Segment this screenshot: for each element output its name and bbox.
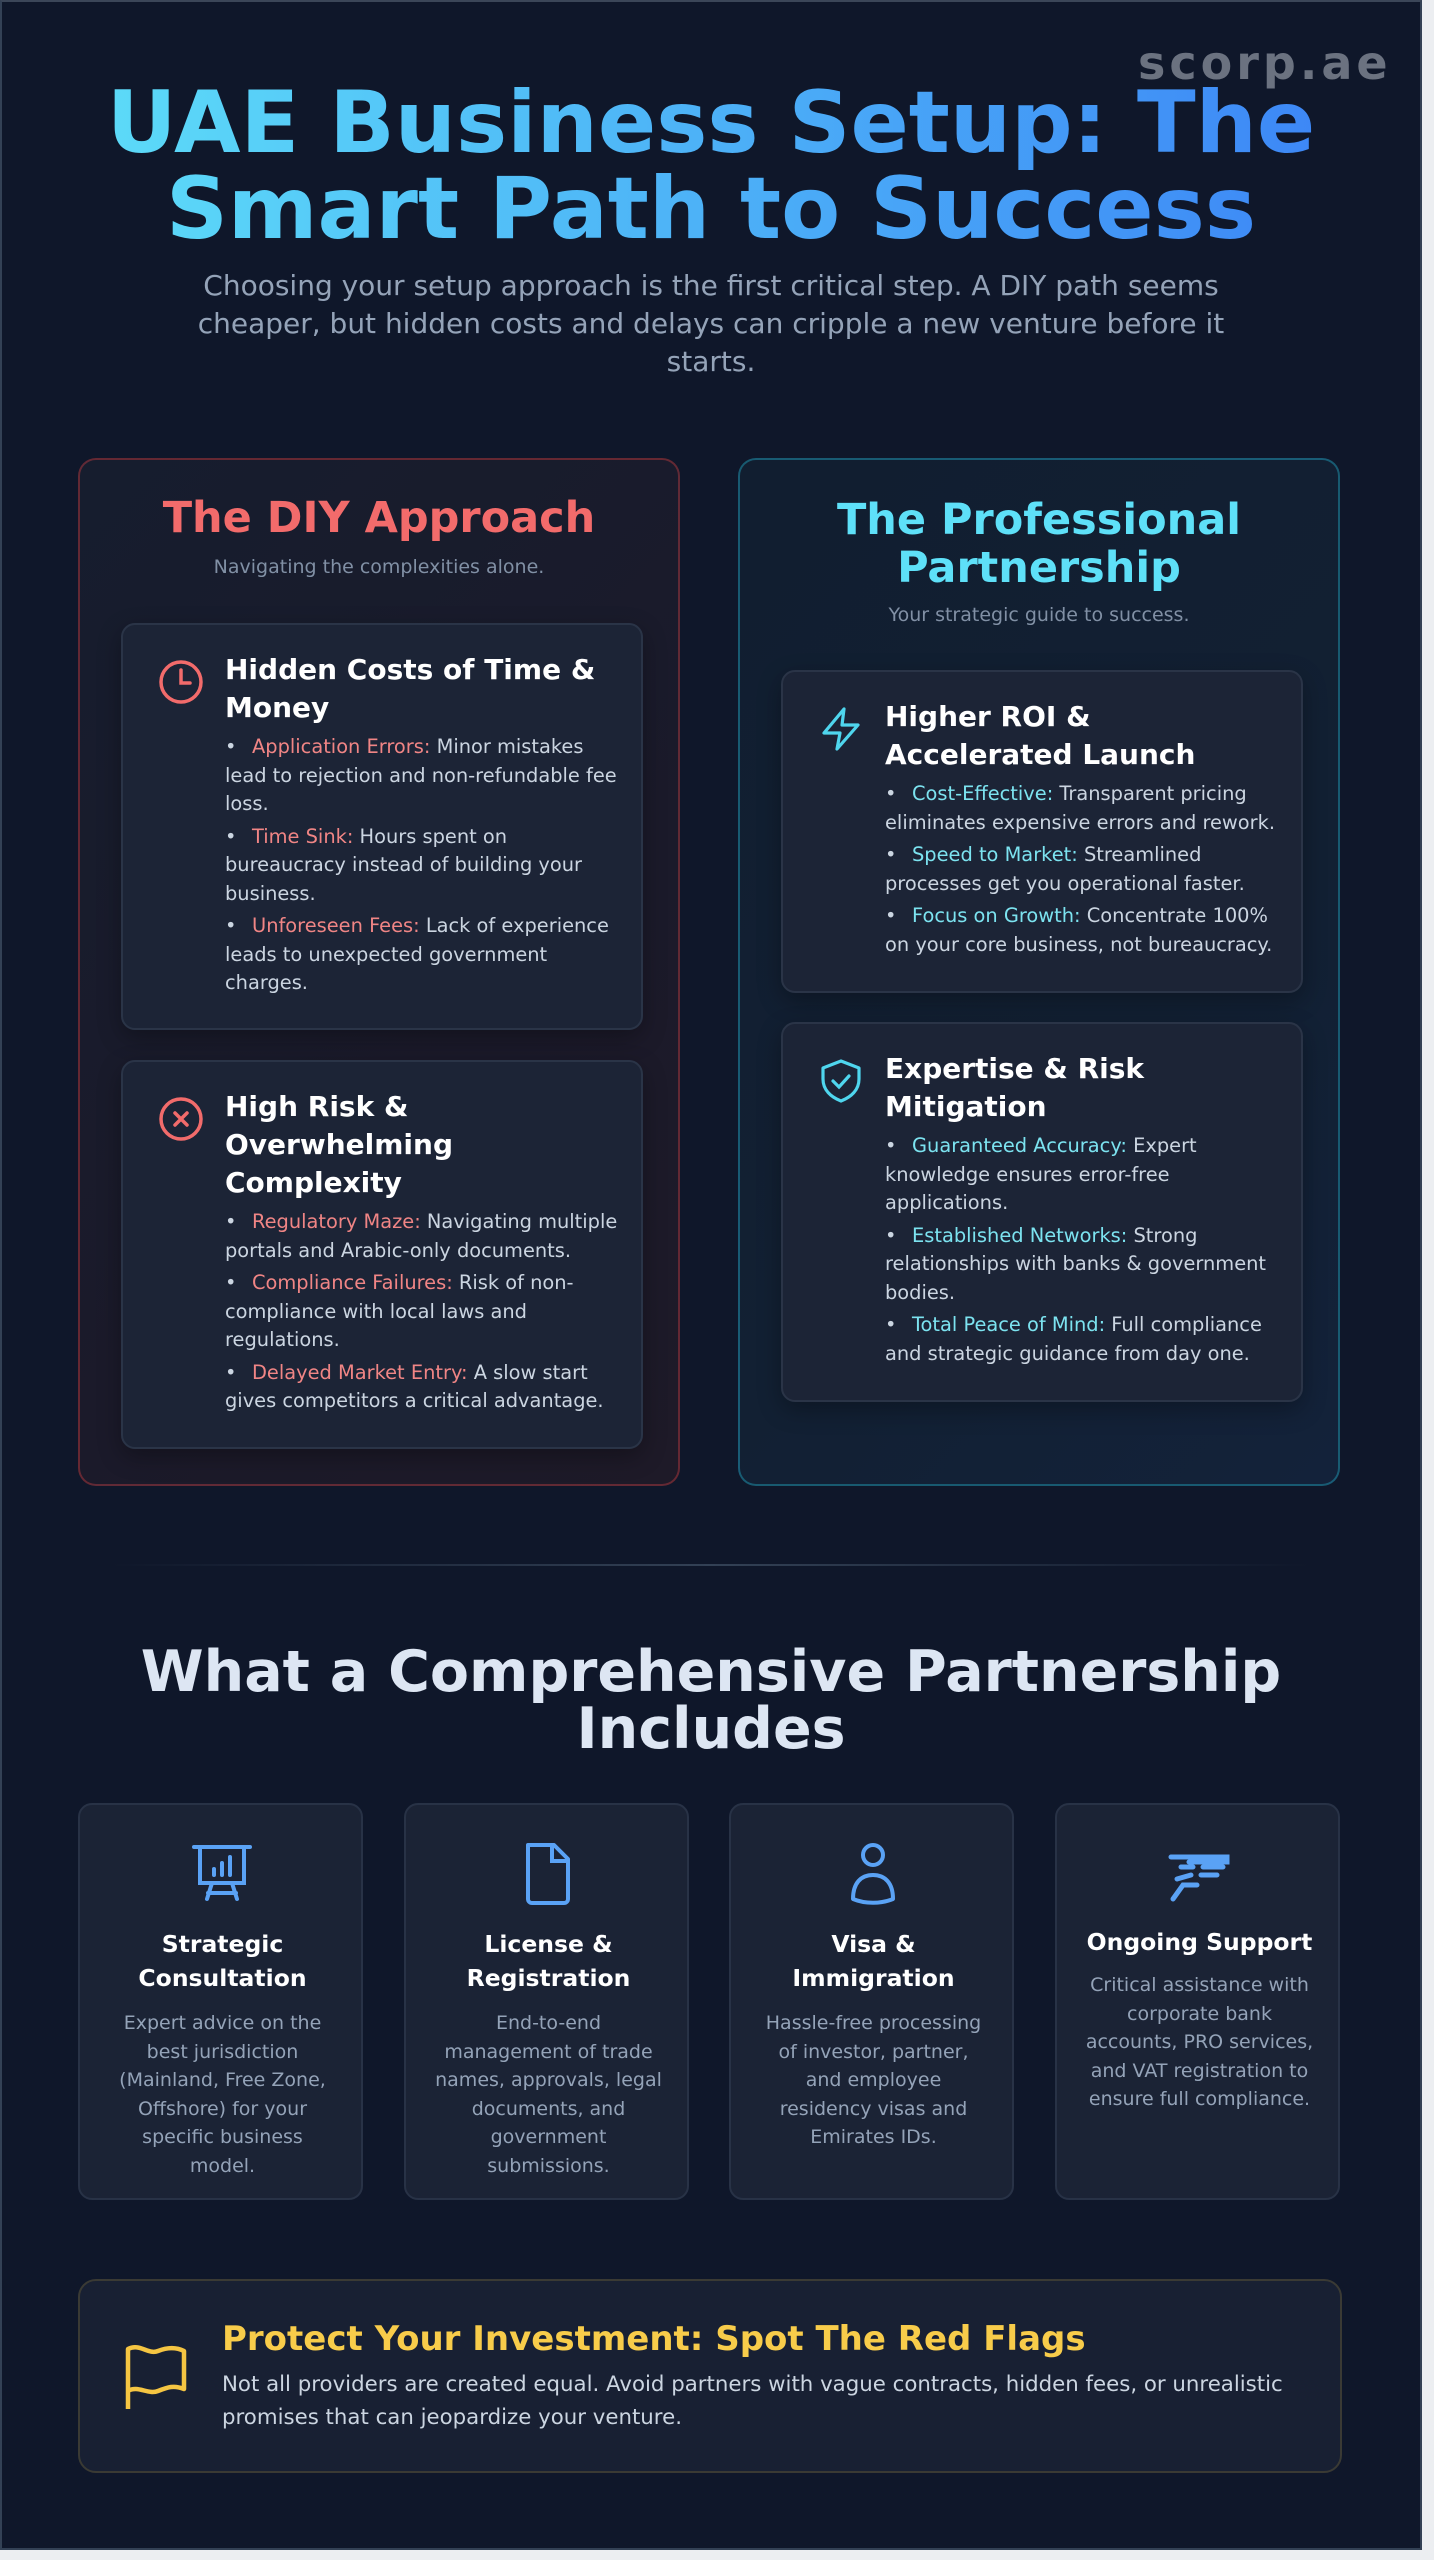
service: visa: Emirates IDs.	[810, 2126, 937, 2148]
subtitle: Choosing your setup approach is the first critical step. A DIY path seems cheaper, but hidden costs and delays can cripple a new venture before it starts.	[198, 269, 1224, 378]
card text: Cost-Effective: Transparent pricing eliminates expensive errors and rework.	[885, 782, 1275, 834]
card text: Guaranteed Accuracy: Expert knowledge ensures error-free applications.	[885, 1134, 1197, 1214]
section heading: What a Comprehensive Partnership	[141, 1639, 1281, 1705]
service: strategic consultation: (Mainland, Free Zone,	[119, 2069, 326, 2091]
service: license: government	[491, 2126, 606, 2148]
card text: •	[885, 904, 896, 927]
icon: lightning	[822, 707, 860, 751]
card text: •	[885, 1313, 896, 1336]
icon: support	[1168, 1854, 1230, 1902]
card text: Delayed Market Entry: A slow start gives competitors a critical advantage.	[225, 1360, 604, 1412]
card text: •	[225, 1360, 236, 1384]
service: strategic consultation: model.	[190, 2154, 255, 2176]
service: license: management of trade	[444, 2040, 653, 2062]
service: visa: Immigration	[792, 1964, 955, 1992]
service: license: names, approvals, legal	[435, 2069, 662, 2091]
service: visa: of investor, partner,	[778, 2040, 969, 2062]
card text	[885, 700, 1275, 956]
section heading: Includes	[576, 1696, 846, 1762]
card text: Hidden Costs of Time & Money	[225, 653, 595, 724]
card text: •	[885, 1224, 896, 1246]
card text: •	[885, 782, 896, 805]
card: hidden costs	[121, 623, 643, 1030]
service: visa: Hassle-free processing	[766, 2012, 981, 2034]
service: strategic consultation: Expert advice on the	[124, 2012, 321, 2034]
service: strategic consultation: best jurisdiction	[147, 2040, 298, 2062]
service: ongoing support: Critical assistance with	[1090, 1974, 1309, 1996]
card text: Application Errors: Minor mistakes lead to rejection and non-refundable fee loss.	[225, 735, 617, 815]
card text: •	[225, 914, 236, 937]
card text: Time Sink: Hours spent on bureaucracy instead of building your business.	[225, 824, 582, 904]
panel: professional partnership	[738, 458, 1340, 1486]
card text: Focus on Growth: Concentrate 100% on your core business, not bureaucracy.	[885, 904, 1272, 956]
card text: Compliance Failures: Risk of non-compliance with local laws and regulations.	[225, 1271, 574, 1351]
section heading	[141, 1639, 1281, 1762]
panel: DIY approach	[78, 458, 680, 1486]
card text: Unforeseen Fees: Lack of experience leads to unexpected government charges.	[225, 914, 609, 994]
icon: presentation	[192, 1845, 252, 1901]
card text	[225, 1090, 617, 1412]
panel subtitle: Your strategic guide to success.	[888, 604, 1190, 626]
title: Smart Path to Success	[166, 159, 1256, 259]
service: license: Registration	[467, 1964, 630, 1992]
card text: Higher ROI & Accelerated Launch	[885, 700, 1195, 771]
icon: shield check	[821, 1059, 861, 1103]
heading: DIY: The DIY Approach	[163, 493, 595, 543]
card text: Total Peace of Mind: Full compliance and strategic guidance from day one.	[885, 1313, 1262, 1364]
card text	[885, 1052, 1266, 1364]
service: visa: residency visas and	[780, 2098, 967, 2120]
card text: High Risk & Overwhelming Complexity	[225, 1090, 453, 1199]
callout: red flags	[78, 2279, 1342, 2473]
card text: •	[885, 1134, 896, 1157]
card: higher ROI	[781, 670, 1303, 993]
card text: Regulatory Maze: Navigating multiple portals and Arabic-only documents.	[225, 1210, 617, 1262]
service: license	[404, 1803, 689, 2200]
service: ongoing support: Ongoing Support	[1087, 1928, 1312, 1956]
heading: professional: The Professional	[837, 495, 1241, 545]
icon: x circle	[159, 1097, 203, 1141]
service: visa	[729, 1803, 1014, 2200]
card: high risk	[121, 1060, 643, 1449]
service: visa: and employee	[806, 2069, 941, 2091]
service: ongoing support	[1055, 1803, 1340, 2200]
service: strategic consultation: Consultation	[138, 1964, 307, 1992]
service: ongoing support: ensure full compliance.	[1089, 2088, 1310, 2110]
heading: professional: Partnership	[897, 543, 1181, 593]
service: strategic consultation: Offshore) for your	[138, 2098, 307, 2120]
service: ongoing support: corporate bank	[1127, 2002, 1272, 2024]
service: visa: Visa &	[831, 1930, 916, 1958]
card text: Speed to Market: Streamlined processes get you operational faster.	[885, 843, 1245, 894]
card text: •	[885, 843, 896, 866]
panel subtitle: Navigating the complexities alone.	[214, 556, 544, 578]
icon: flag	[126, 2345, 186, 2409]
brand watermark: scorp.ae	[1138, 36, 1392, 90]
icon: clock	[159, 660, 203, 704]
callout text: Protect Your Investment: Spot The Red Flags	[222, 2319, 1086, 2359]
service: ongoing support: accounts, PRO services,	[1086, 2031, 1313, 2053]
card text: Established Networks: Strong relationships with banks & government bodies.	[885, 1224, 1266, 1304]
service: strategic consultation: specific business	[142, 2126, 303, 2148]
icon: document	[526, 1843, 570, 1905]
card text: •	[225, 735, 236, 758]
service: license: documents, and	[472, 2098, 625, 2120]
card text: •	[225, 824, 236, 848]
callout text: Not all providers are created equal. Avoid partners with vague contracts, hidden fees, or unrealistic promises that can jeopardize your venture.	[222, 2372, 1283, 2430]
title: UAE Business Setup: The	[107, 73, 1315, 173]
card text: •	[225, 1271, 236, 1294]
service: license: submissions.	[487, 2154, 610, 2176]
card text: Expertise & Risk Mitigation	[885, 1052, 1144, 1123]
title	[20, 80, 1402, 252]
service: strategic consultation	[78, 1803, 363, 2200]
card: expertise	[781, 1022, 1303, 1402]
card text	[225, 653, 617, 994]
callout text	[222, 2319, 1283, 2430]
icon: person	[851, 1843, 895, 1905]
heading: professional	[837, 495, 1241, 593]
service: license: End-to-end	[496, 2012, 601, 2034]
service: strategic consultation: Strategic	[162, 1930, 283, 1958]
service: license: License &	[484, 1930, 613, 1958]
card text: •	[225, 1210, 236, 1233]
service: ongoing support: and VAT registration to	[1091, 2060, 1308, 2082]
